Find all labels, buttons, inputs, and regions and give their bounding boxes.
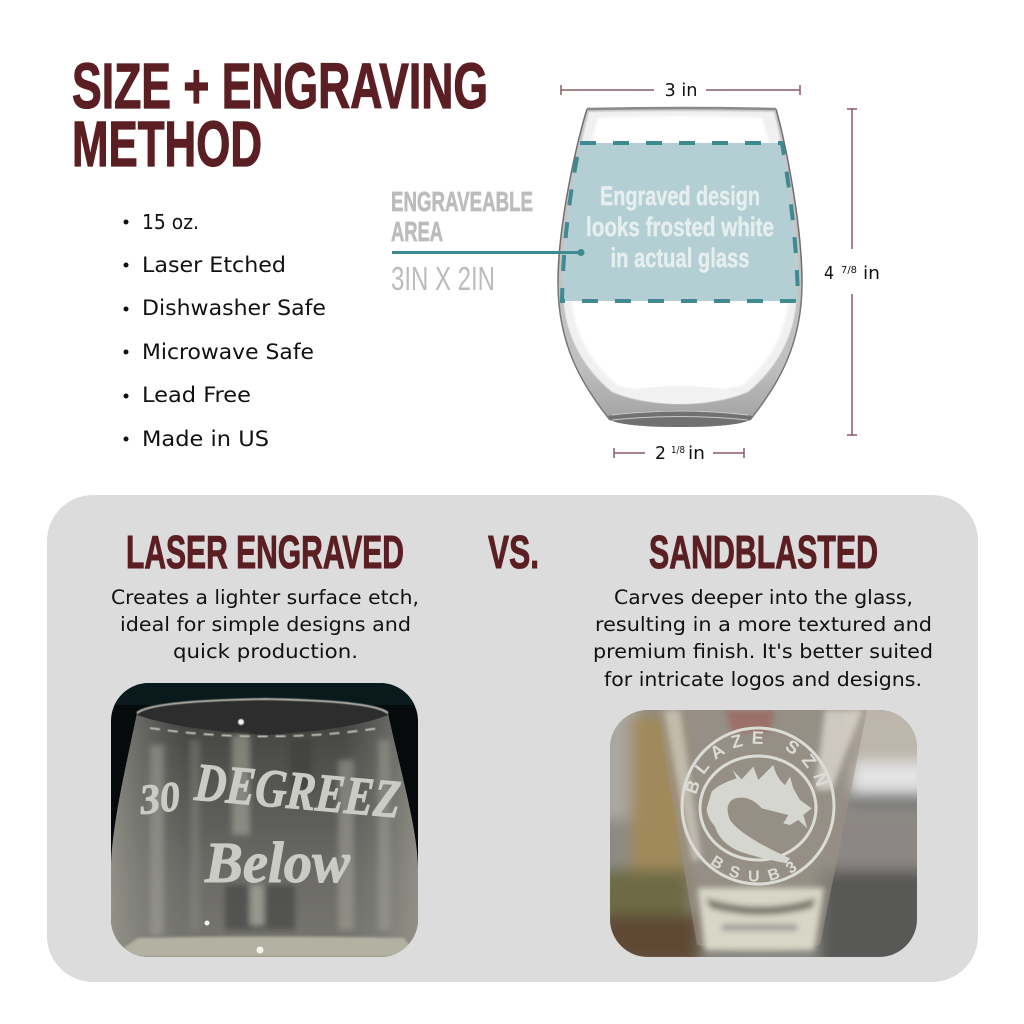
dimension: top width: 3 in [664,80,698,101]
dragon [707,765,812,863]
heading: sandblasted: SANDBLASTED [649,526,878,578]
photo: laser engraved glass [111,683,418,957]
engraveable area overlay [562,143,798,301]
sandblasted description: premium finish. It's better suited [593,640,933,663]
emblem text: Blaze SZN: BLAZE SZN [685,731,828,794]
engraved text: 30 Degreez [140,764,402,818]
feature list: Made in US [142,427,269,451]
engraved design note: in actual glass [610,243,750,273]
sandblasted description [593,586,933,691]
engraved text: 30 Degreez: DEGREEZ [192,752,403,830]
emblem text: BSUB3: BSUB3 [710,855,796,882]
engraveable area label [391,186,584,297]
engraved design note: Engraved design [600,181,760,211]
dimension: base width: 2 [655,443,666,464]
feature list: 15 oz. [142,210,199,234]
title [72,50,488,180]
feature list [124,210,326,451]
feature list: Lead Free [142,383,251,407]
feature list: Microwave Safe [142,340,314,364]
dimension: height: 4 [824,263,834,284]
engraved design note [586,181,774,273]
dimension: base width [614,443,744,464]
engraveable area label: AREA [391,216,443,247]
engraveable area label: ENGRAVEABLE [391,186,533,217]
laser engraved description [111,586,419,663]
title: SIZE + ENGRAVING [72,50,488,122]
laser engraved description: ideal for simple designs and [120,613,411,636]
sandblasted description: resulting in a more textured and [595,613,932,636]
photo: sandblasted shot glass [610,710,917,957]
comparison panel [47,495,978,982]
heading: vs: VS. [488,526,539,578]
sandblasted description: for intricate logos and designs. [604,668,922,691]
wine glass illustration [558,108,802,427]
dimension: base width: in [688,443,705,464]
dimension: height: 7/8 [841,265,857,276]
dimension: top width [561,80,800,101]
engraved design note: looks frosted white [586,212,774,242]
heading: laser engraved: LASER ENGRAVED [126,526,404,578]
engraved emblem [682,728,834,884]
engraveable area label: 3IN X 2IN [391,260,495,297]
dimension: height [824,109,880,435]
laser engraved description: Creates a lighter surface etch, [111,586,419,609]
dimension: base width: 1/8 [671,445,685,456]
laser engraved description: quick production. [173,640,358,663]
feature list: Dishwasher Safe [142,296,326,320]
dimension: height: in [863,263,880,284]
engraved text: Below: Below [204,830,350,895]
sandblasted description: Carves deeper into the glass, [614,586,913,609]
engraved text: 30 Degreez: 30 [137,774,182,824]
feature list: Laser Etched [142,253,286,277]
title: METHOD [72,108,262,180]
